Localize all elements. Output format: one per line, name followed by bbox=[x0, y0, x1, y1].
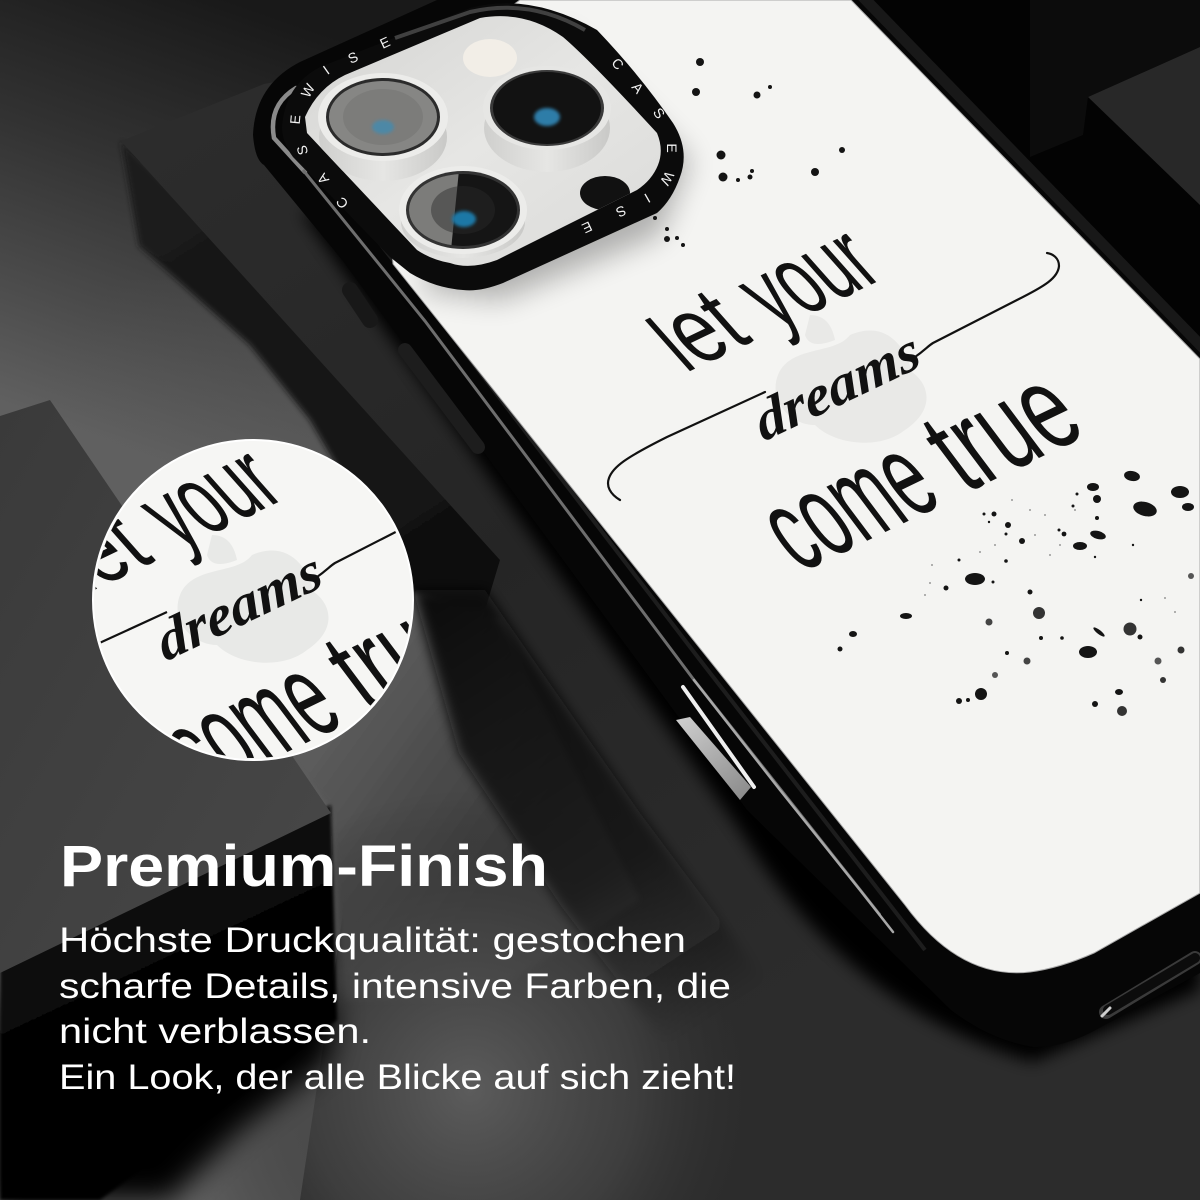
magnified swash bbox=[69, 520, 419, 657]
body text: scharfe Details, intensive Farben, die bbox=[59, 967, 731, 1006]
quote: come true: come bbox=[731, 411, 963, 595]
action button bbox=[350, 290, 370, 320]
CASEWISE lettering left: E bbox=[287, 114, 303, 125]
magnified come true: come bbox=[133, 631, 365, 815]
magnified dreams: dreams bbox=[149, 537, 329, 674]
magnified come true: true bbox=[299, 562, 509, 736]
chrome side stripe bbox=[303, 170, 880, 915]
top-right block bbox=[1088, 47, 1200, 205]
lens: lower bbox=[401, 171, 527, 254]
CASEWISE lettering right: E bbox=[664, 143, 680, 153]
magnified print bbox=[95, 454, 409, 758]
phone case bbox=[253, 0, 1200, 1062]
quote: let your bbox=[644, 234, 876, 372]
top-right panel bbox=[1030, 0, 1200, 157]
quote: let your: let bbox=[623, 269, 770, 390]
magnified apple logo bbox=[178, 535, 329, 663]
top glossy highlight bbox=[395, 8, 585, 38]
lens: main bbox=[318, 73, 448, 181]
CASEWISE lettering right: A bbox=[629, 79, 647, 97]
island black ring bbox=[282, 3, 684, 290]
CASEWISE lettering left: W bbox=[297, 80, 318, 100]
lower-left block front face bbox=[0, 805, 337, 1200]
body text: Höchste Druckqualität: gestochen bbox=[59, 921, 686, 960]
heading: Premium-Finish bbox=[60, 834, 548, 899]
lower-left shadow soft bbox=[0, 1000, 337, 1200]
camera island bbox=[282, 3, 684, 290]
CASEWISE lettering left: S bbox=[293, 144, 311, 157]
CASEWISE lettering right bbox=[579, 55, 680, 237]
CASEWISE lettering left bbox=[287, 33, 393, 212]
volume button bbox=[405, 350, 478, 447]
CASEWISE lettering left: I bbox=[320, 62, 332, 78]
CASEWISE lettering left: E bbox=[377, 33, 393, 52]
quote: let your: your bbox=[711, 203, 902, 348]
window bbox=[305, 16, 661, 266]
body text: Ein Look, der alle Blicke auf sich zieht! bbox=[59, 1058, 736, 1097]
CASEWISE lettering right: S bbox=[650, 105, 668, 122]
magnified let your: let bbox=[25, 489, 172, 610]
white back panel bbox=[380, 0, 1200, 973]
charging port bbox=[1102, 958, 1195, 1016]
CASEWISE lettering left: S bbox=[345, 48, 361, 67]
circle base bbox=[93, 440, 413, 760]
phone shadow bbox=[300, 210, 1200, 1062]
island shadow bbox=[413, 117, 700, 314]
CASEWISE lettering right: S bbox=[613, 202, 629, 221]
microphone hole bbox=[580, 176, 630, 210]
CASEWISE lettering left: A bbox=[313, 170, 332, 187]
top-right dark zone bbox=[874, 0, 1200, 337]
floor glow bbox=[215, 868, 678, 1200]
quote swash bbox=[608, 253, 1059, 500]
gray rim beside island bbox=[273, 88, 305, 172]
CASEWISE lettering right: C bbox=[608, 55, 627, 73]
inner glossy line bbox=[380, 248, 926, 951]
dark diagonal band bbox=[413, 590, 726, 1007]
CASEWISE lettering left: C bbox=[333, 194, 351, 212]
quote: come true: true bbox=[897, 342, 1107, 516]
light wedge bbox=[316, 590, 554, 971]
magnified let your bbox=[22, 423, 304, 611]
CASEWISE lettering right: I bbox=[642, 190, 653, 206]
quote: come true bbox=[770, 386, 1079, 568]
right frame strip bbox=[862, 0, 1200, 355]
central block side face bbox=[121, 141, 520, 610]
CASEWISE lettering right: W bbox=[657, 169, 678, 189]
chrome side stripe bright part bbox=[694, 680, 893, 932]
body text bbox=[59, 921, 736, 1097]
magnifier circle callout bbox=[92, 439, 414, 761]
lens: upper right bbox=[483, 66, 611, 172]
paint splatter bbox=[653, 58, 1194, 716]
side button chrome bbox=[676, 687, 754, 800]
magnified let your: your bbox=[113, 423, 304, 568]
CASEWISE lettering right: E bbox=[579, 218, 595, 237]
black case body bbox=[253, 0, 1200, 1047]
flash bbox=[463, 39, 517, 77]
body text: nicht verblassen. bbox=[59, 1012, 371, 1051]
lower-left block top bbox=[0, 400, 331, 973]
apple logo ghost bbox=[776, 315, 927, 443]
quote: dreams: dreams bbox=[747, 317, 927, 454]
